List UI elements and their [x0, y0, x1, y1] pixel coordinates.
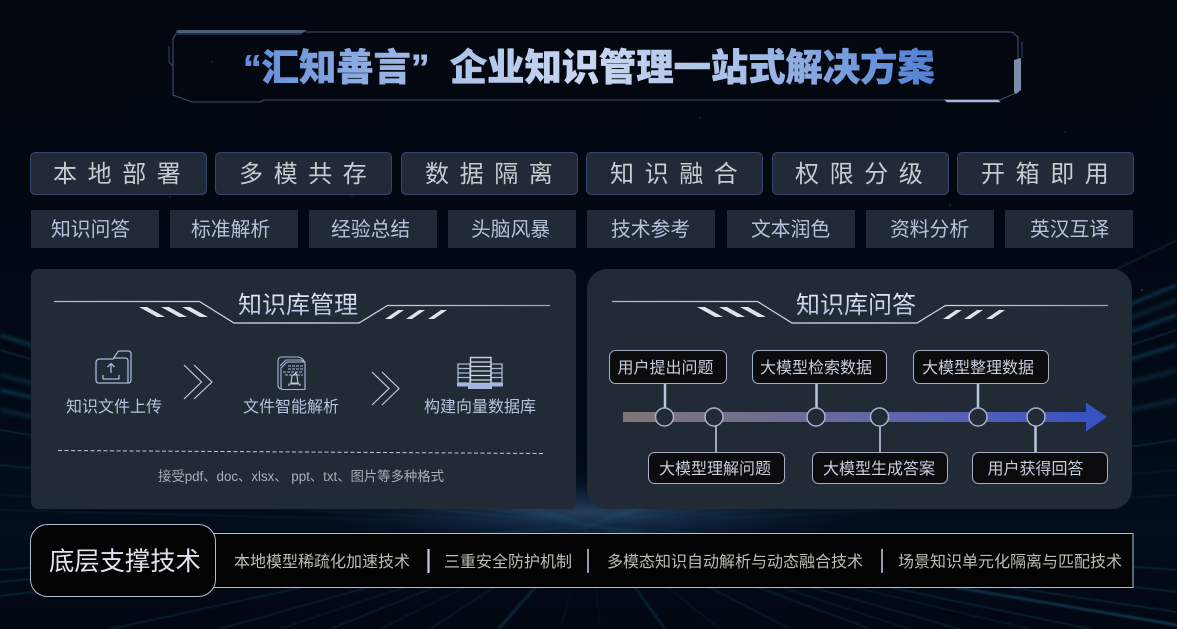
chip: 本地部署: [30, 152, 206, 194]
caption: supported formats: 接受pdf、doc、xlsx、 ppt、txt、图片等多种格式: [158, 468, 444, 484]
panel: 知识库问答: [587, 269, 1132, 509]
chip: 知识融合: 知识融合: [610, 161, 748, 188]
step box: 大模型检索数据: [752, 350, 886, 384]
step box: 用户提出问题: [610, 350, 726, 384]
heading: 知识库管理: [54, 292, 550, 323]
tag: 英汉互译: 英汉互译: [1030, 219, 1109, 241]
label: 底层支撑技术: [30, 524, 216, 596]
step box: 用户提出问题: 用户提出问题: [618, 359, 714, 377]
chip: 知识融合: [586, 152, 762, 194]
title frame: [169, 30, 1022, 102]
chip: 开箱即用: 开箱即用: [981, 161, 1119, 188]
arrow: chevrons 2: [372, 372, 399, 405]
chip: 数据隔离: 数据隔离: [425, 161, 563, 188]
icon: document parsing: [278, 357, 305, 390]
chip: 多模共存: [216, 152, 392, 194]
chip: 权限分级: [772, 152, 948, 194]
tag: 技术参考: 技术参考: [611, 219, 690, 241]
heading: 知识库问答: 知识库问答: [796, 292, 916, 319]
technology items: 本地模型稀疏化加速技术: [234, 553, 410, 571]
arrow: chevrons 1: [184, 365, 212, 399]
step box: 用户获得回答: [972, 452, 1108, 484]
timeline arrow: [623, 402, 1107, 432]
step: 知识文件上传: 知识文件上传: [66, 398, 162, 416]
feature chips row: [30, 152, 1134, 194]
icon: server database: [457, 358, 503, 389]
tag: 标准解析: [170, 210, 298, 248]
technology items: 多模态知识自动解析与动态融合技术: [607, 553, 863, 571]
technology items: 场景知识单元化隔离与匹配技术: [898, 553, 1122, 571]
chip: 本地部署: 本地部署: [53, 161, 191, 188]
step: 文件智能解析: [243, 357, 339, 416]
step box: 大模型检索数据: 大模型检索数据: [760, 359, 872, 377]
title: “汇知善言” 企业知识管理一站式解决方案: [243, 46, 935, 88]
tag: 知识问答: [31, 210, 159, 248]
chip: 开箱即用: [958, 152, 1134, 194]
panel: 知识库管理: [31, 269, 576, 509]
tag: 经验总结: 经验总结: [331, 219, 410, 241]
chip: 权限分级: 权限分级: [795, 161, 933, 188]
divider: dashed: [58, 450, 544, 454]
technology items: 三重安全防护机制: [444, 553, 572, 571]
chip: 数据隔离: [402, 152, 578, 194]
tag: 经验总结: [309, 210, 437, 248]
connectors: [665, 384, 1036, 452]
step: 构建向量数据库: 构建向量数据库: [424, 398, 536, 416]
technology items: [234, 553, 1122, 571]
step box: 大模型整理数据: [914, 350, 1048, 384]
function tags row: [31, 210, 1133, 248]
tag: 标准解析: 标准解析: [191, 219, 270, 241]
chip: 多模共存: 多模共存: [239, 161, 377, 188]
step: 构建向量数据库: [424, 358, 536, 416]
tag: 文本润色: [727, 210, 855, 248]
step box: 大模型理解问题: 大模型理解问题: [659, 460, 771, 478]
tag: 文本润色: 文本润色: [751, 219, 830, 241]
tag: 资料分析: [866, 210, 994, 248]
bottom bar: 底层支撑技术: [30, 524, 1133, 596]
tag: 英汉互译: [1005, 210, 1133, 248]
tag: 头脑风暴: 头脑风暴: [471, 219, 550, 241]
heading: 知识库管理: 知识库管理: [238, 292, 358, 319]
tag: 技术参考: [587, 210, 715, 248]
icon: folder upload: [96, 351, 131, 383]
tag: 资料分析: 资料分析: [890, 219, 969, 241]
timeline nodes: [656, 408, 1045, 426]
step box: 大模型理解问题: [648, 452, 784, 484]
label: 底层支撑技术: 底层支撑技术: [49, 548, 201, 576]
tag: 知识问答: 知识问答: [51, 219, 130, 241]
technology list bar: [206, 534, 1133, 588]
tag: 头脑风暴: [448, 210, 576, 248]
heading: 知识库问答: [612, 292, 1108, 323]
step box: 大模型生成答案: [812, 452, 948, 484]
step: 文件智能解析: 文件智能解析: [243, 398, 339, 416]
step box: 用户获得回答: 用户获得回答: [988, 460, 1084, 478]
step box: 大模型生成答案: 大模型生成答案: [823, 460, 935, 478]
step box: 大模型整理数据: 大模型整理数据: [922, 359, 1034, 377]
step: 知识文件上传: [66, 351, 162, 416]
